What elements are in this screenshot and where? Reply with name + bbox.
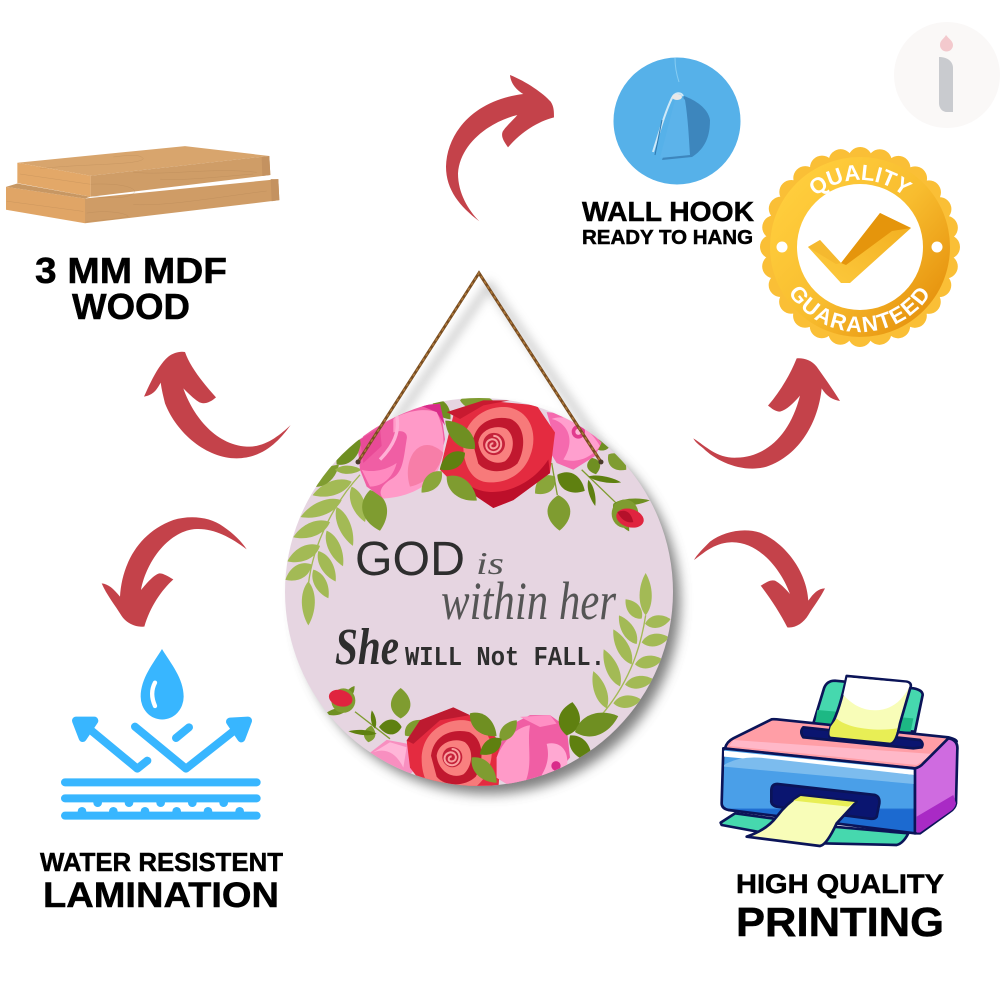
hanging rope	[356, 273, 604, 464]
icon: water resistant	[65, 649, 257, 816]
top right rosebud	[612, 498, 650, 532]
bottom pink rose	[497, 715, 570, 788]
arrow: to wall hook	[446, 75, 554, 221]
bottom left rosebud and leaves	[327, 686, 421, 742]
top right pink rose	[547, 412, 602, 470]
arrow: to lamination	[102, 517, 247, 627]
label: water resistent lamination	[40, 847, 283, 915]
sign text: god is within her	[355, 533, 617, 631]
label: wall hook ready to hang: READY TO HANG	[582, 227, 753, 249]
label: wall hook ready to hang	[582, 196, 754, 249]
bottom red rose	[406, 707, 502, 786]
label: high quality printing: PRINTING	[736, 899, 944, 945]
label: water resistent lamination: WATER RESISTENT	[40, 847, 283, 877]
panel: hanging round sign	[282, 273, 680, 795]
arrow: to MDF wood	[144, 352, 291, 458]
sign artwork	[282, 392, 673, 795]
label: water resistent lamination: LAMINATION	[43, 876, 279, 915]
watermark logo	[894, 22, 1000, 128]
top left pink rose	[358, 404, 445, 498]
leaves over top rose	[422, 420, 477, 501]
bottom small pink rose	[370, 740, 413, 774]
icon: quality guaranteed badge: GUARANTEED	[791, 286, 928, 332]
label: 3 mm mdf wood: WOOD	[72, 286, 190, 327]
bottom green leaves	[470, 702, 618, 783]
left fern	[282, 475, 371, 625]
top red rose	[440, 400, 555, 508]
icon: printer	[721, 676, 957, 846]
sign text: god is within her: GOD	[355, 533, 465, 586]
label: 3 mm mdf wood	[35, 250, 227, 327]
sign text: god is within her: is	[476, 545, 504, 581]
right fern	[588, 573, 672, 717]
sign shadow	[296, 285, 680, 794]
arrow: to printing	[694, 530, 825, 627]
sign text: she will not fall	[335, 619, 605, 676]
label: high quality printing	[736, 869, 944, 945]
icon: quality guaranteed badge	[760, 147, 960, 347]
icon: wall hook	[614, 58, 740, 184]
sign text: she will not fall: She	[335, 619, 399, 676]
label: high quality printing: HIGH QUALITY	[736, 869, 944, 899]
icon: quality guaranteed badge: QUALITY	[810, 164, 913, 194]
top green leaves	[309, 392, 631, 534]
label: 3 mm mdf wood: 3 MM MDF	[35, 250, 227, 291]
arrow: to quality badge	[693, 358, 840, 469]
label: wall hook ready to hang: WALL HOOK	[582, 196, 754, 227]
sign text: she will not fall: WILL Not FALL.	[405, 644, 605, 674]
icon: wood planks	[6, 146, 279, 223]
sign text: god is within her: within her	[441, 571, 617, 631]
